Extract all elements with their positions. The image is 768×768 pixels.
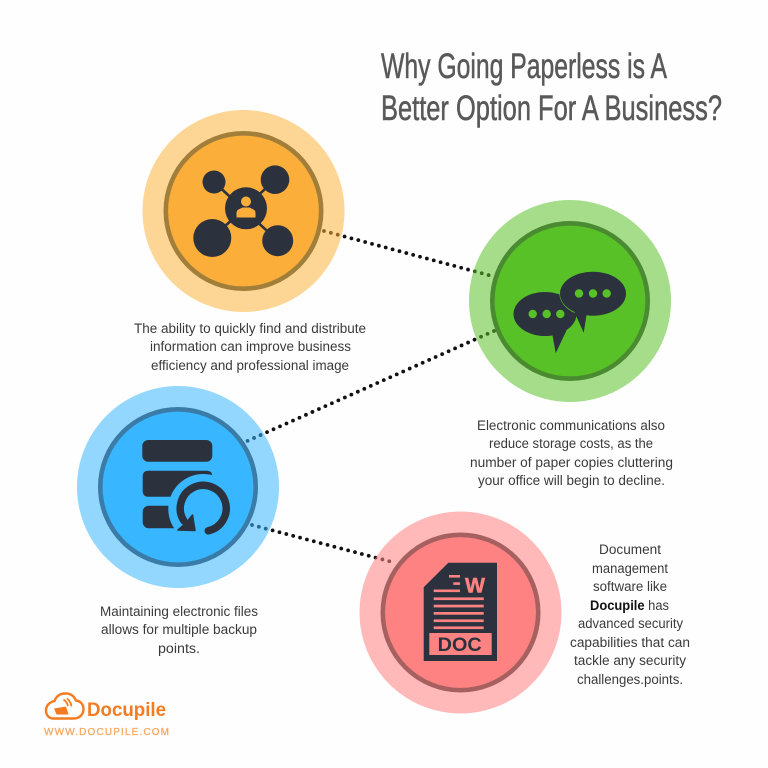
panel: orange network circle <box>142 110 344 312</box>
dotted connector: orange to green <box>324 231 492 276</box>
title <box>381 47 722 128</box>
text block: document management: Document <box>599 542 661 557</box>
text block: document management: tackle any security <box>574 653 686 668</box>
panel: green chat circle <box>469 200 671 402</box>
logo: Docupile: Docupile <box>87 700 166 721</box>
text block: document management: management <box>592 561 668 576</box>
text block: find and distribute <box>134 321 366 373</box>
text block: find and distribute: The ability to quickly find and distribute <box>134 321 366 336</box>
text block: find and distribute: efficiency and professional image <box>151 358 349 373</box>
icon: cloud with book <box>46 693 84 718</box>
icon: database backup <box>142 440 238 544</box>
dotted connector: green to blue <box>245 331 494 442</box>
panel: red document circle <box>360 512 562 714</box>
text block: document management: Docupile has <box>590 598 669 613</box>
text block: document management: advanced security <box>578 616 683 631</box>
text block: electronic communications: your office will begin to decline. <box>478 473 665 488</box>
text block: electronic communications <box>470 418 673 488</box>
icon: DOC file: W <box>465 574 486 598</box>
icon: DOC file: DOC <box>438 635 482 656</box>
dotted connector: blue to red <box>252 525 396 563</box>
text block: backup points <box>100 604 258 656</box>
text block: electronic communications: number of paper copies cluttering <box>470 455 673 470</box>
text block: backup points: Maintaining electronic files <box>100 604 258 619</box>
text block: backup points: points. <box>158 641 200 656</box>
icon: network with user <box>193 165 293 257</box>
panel: blue backup circle <box>77 386 279 588</box>
text block: electronic communications: reduce storage costs, as the <box>489 436 653 451</box>
icon: DOC file <box>424 563 497 661</box>
icon: speech bubbles <box>514 271 626 353</box>
logo: Docupile <box>44 693 169 738</box>
text block: document management: challenges.points. <box>577 672 683 687</box>
logo: Docupile: WWW.DOCUPILE.COM <box>44 727 169 738</box>
text block: document management <box>570 542 690 687</box>
text block: backup points: allows for multiple backup <box>101 622 257 637</box>
text block: electronic communications: Electronic communications also <box>477 418 665 433</box>
text block: document management: capabilities that can <box>570 635 690 650</box>
text block: find and distribute: information can improve business <box>150 339 351 354</box>
text block: document management: software like <box>593 579 667 594</box>
